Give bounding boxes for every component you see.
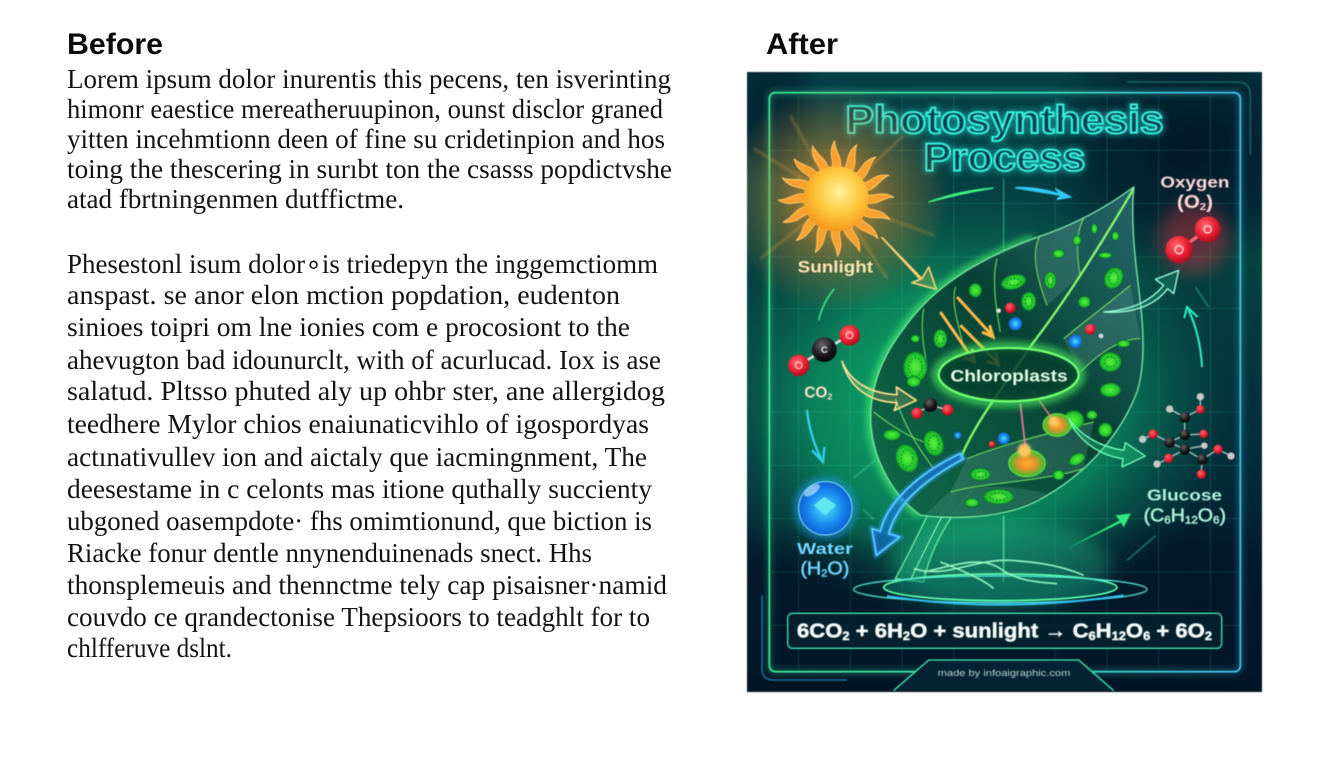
label: glucose: 6: [1213, 515, 1220, 527]
footer credit: made by infoaigraphic.com: [938, 668, 1070, 678]
title: [845, 98, 1164, 179]
leaf glow: [871, 239, 1034, 515]
arrow: top green arc: [929, 188, 994, 202]
text block: second paragraph: sinioes toipri om lne ionies com e procosiont to the: [67, 312, 630, 342]
heading: after: After: [766, 28, 838, 61]
label: glucose: (C: [1144, 506, 1163, 526]
label: water: [797, 541, 853, 580]
molecule: water: [794, 477, 857, 540]
leaf: [871, 187, 1143, 582]
stem: [895, 462, 974, 582]
label: glucose: [1144, 488, 1226, 527]
label: water: O): [827, 559, 849, 579]
molecule: oxygen: [1159, 204, 1229, 274]
equation text: O: [1126, 619, 1143, 642]
text block: second paragraph: ubgoned oasempdote· fhs omimtionund, que biction is: [67, 506, 652, 536]
equation text: + 6H: [850, 619, 903, 642]
title: Photosynthesis: [845, 98, 1164, 142]
poster background: [637, 25, 1344, 742]
arrow: sunlight to leaf: [882, 238, 936, 289]
label: water: 2: [821, 569, 828, 580]
holographic base: [854, 515, 1147, 607]
text block: second paragraph: couvdo ce qrandectonise Thepsioors to teadghlt for to: [67, 602, 650, 632]
title: Photosynthesis: [845, 98, 1164, 142]
heading: before: Before: [67, 28, 163, 61]
leaf blade: [871, 187, 1143, 517]
reaction sites: [1009, 390, 1071, 477]
panel: photosynthesis poster: [746, 71, 1263, 693]
icon: sun: [723, 85, 949, 312]
equation text: 6: [1089, 629, 1096, 643]
glass cell patches: [927, 219, 1140, 516]
text block: second paragraph: Riacke fonur dentle nnynenduinenads snect. Hhs: [67, 538, 592, 568]
text block: second paragraph: ahevugton bad idounurclt, with of acurlucad. Iox is ase: [67, 345, 661, 375]
text block: first paragraph: [67, 64, 672, 214]
molecule: carbon dioxide: [788, 325, 860, 376]
label: oxygen: Oxygen: [1160, 175, 1229, 192]
label: oxygen: 2: [1200, 202, 1207, 213]
equation text: 6: [1143, 629, 1151, 643]
roots: [914, 560, 1084, 589]
chloroplast cells: [883, 224, 1130, 507]
text block: second paragraph: actınativullev ion and aictaly que iacmingnment, The: [67, 442, 647, 472]
text block: second paragraph: [67, 249, 668, 663]
label: CO2: 2: [827, 391, 832, 401]
inner sunlight arrows: [940, 297, 999, 365]
label: water: (H: [800, 559, 819, 579]
equation text: H: [1096, 619, 1112, 642]
arrow: water absorption: [872, 454, 964, 555]
label: glucose: Glucose: [1147, 488, 1222, 505]
arrow: oxygen release: [1104, 270, 1179, 312]
equation text: 2: [842, 629, 850, 643]
panel: before: [67, 28, 672, 663]
label: water: Water: [797, 541, 853, 558]
arrow: green rising: [1067, 513, 1131, 549]
chloroplasts callout: [937, 347, 1080, 403]
molecules in leaf: [911, 303, 1103, 448]
text block: first paragraph: atad fbrtningenmen dutffictme.: [67, 184, 404, 214]
label: glucose: ): [1219, 506, 1226, 526]
equation text: 12: [1112, 629, 1126, 643]
arrow: CO2 to leaf: [842, 361, 916, 410]
label: oxygen: (O: [1177, 192, 1197, 212]
text block: second paragraph: deesestame in c celonts mas itione quthally succienty: [67, 474, 652, 504]
arrow: CO2 to water: [807, 410, 824, 462]
equation box: [788, 613, 1222, 648]
title: Process: [924, 135, 1085, 179]
text block: first paragraph: toing the thescering in surıbt ton the csasss popdictvshe: [67, 154, 672, 184]
label: chloroplasts: Chloroplasts: [950, 367, 1068, 386]
label: CO2: CO: [804, 384, 827, 401]
arrow: teal upward: [1184, 307, 1202, 367]
label: oxygen: [1160, 175, 1229, 213]
title: Process: [924, 135, 1085, 179]
text block: second paragraph: thonsplemeuis and thennctme tely cap pisaisner·namid: [67, 570, 668, 600]
text block: first paragraph: yitten incehmtionn deen of fine su cridetinpion and hos: [67, 124, 665, 154]
molecule: glucose: [1139, 393, 1235, 479]
label: glucose: 6: [1164, 515, 1171, 527]
leaf midrib: [960, 189, 1134, 459]
molecule: carbon dioxide: C: [821, 345, 828, 355]
equation text: O + sunlight → C: [910, 619, 1089, 642]
label: glucose: O: [1198, 506, 1213, 526]
text block: second paragraph: Phesestonl isum dolor∘is triedepyn the inggemctiomm: [67, 249, 658, 279]
arrow: leaf to glucose: [1069, 419, 1145, 467]
equation text: + 6O: [1150, 619, 1205, 642]
chloroplast inner folds: [901, 271, 1118, 500]
text block: second paragraph: salatud. Pltsso phuted aly up ohbr ster, ane allergidog: [67, 376, 665, 406]
label: glucose: H: [1171, 506, 1185, 526]
decorative light streaks: [854, 287, 1209, 560]
text block: second paragraph: chlfferuve dslnt.: [67, 633, 232, 663]
text block: second paragraph: anspast. se anor elon mction popdation, eudenton: [67, 280, 621, 310]
label: glucose: 12: [1185, 515, 1198, 527]
label: sunlight: Sunlight: [798, 258, 874, 277]
equation text: 2: [903, 629, 910, 643]
arrow: small green arc: [819, 289, 834, 320]
label: oxygen: ): [1206, 192, 1213, 212]
text block: second paragraph: teedhere Mylor chios enaiunaticvihlo of igospordyas: [67, 409, 649, 439]
neon frame: [762, 82, 1250, 691]
leaf veins: [874, 219, 1140, 492]
text block: first paragraph: Lorem ipsum dolor inurentis this pecens, ten isverinting: [67, 64, 671, 94]
arrow: top blue arc: [1015, 188, 1070, 199]
text block: first paragraph: himonr eaestice mereatheruupinon, ounst disclor graned: [67, 94, 663, 124]
equation text: 6CO: [797, 619, 839, 642]
equation text: 2: [1205, 629, 1212, 643]
